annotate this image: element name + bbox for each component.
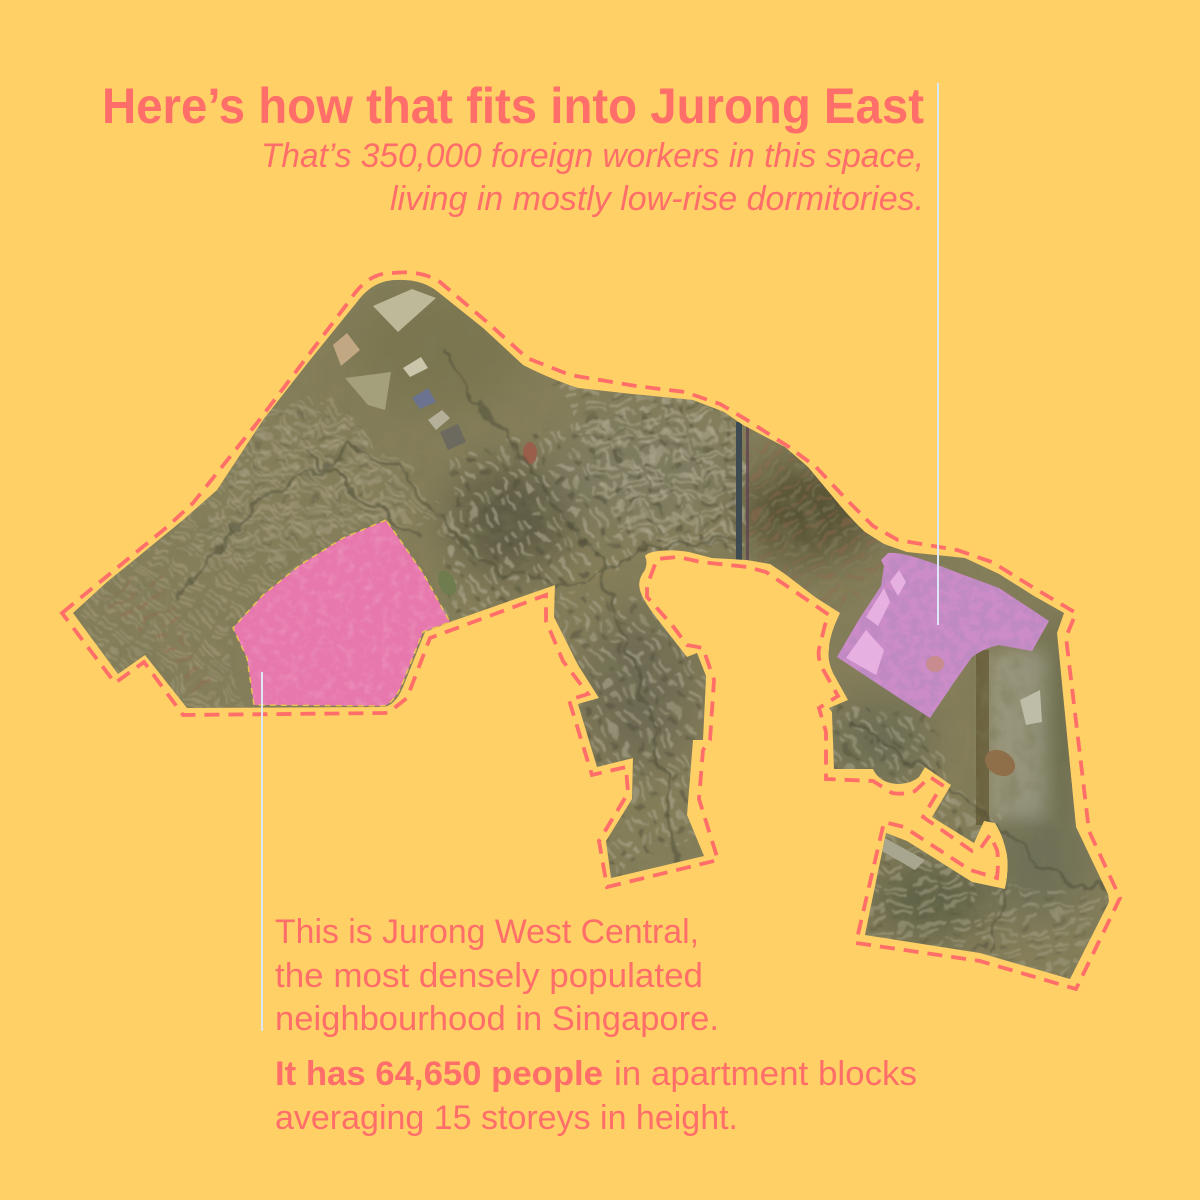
tonal patches bbox=[350, 290, 1090, 935]
subtitle: That’s 350,000 foreign workers in this space, bbox=[261, 137, 924, 175]
highlight: foreign worker footprint in purple bbox=[835, 550, 1051, 720]
description: Jurong West Central: neighbourhood in Singapore. bbox=[275, 1000, 719, 1038]
title: Here’s how that fits into Jurong East bbox=[102, 78, 924, 134]
dashed boundary around the map bbox=[62, 272, 1120, 989]
population fact: It has 64,650 people bbox=[275, 1055, 603, 1093]
road lines bbox=[180, 350, 1100, 950]
subtitle bbox=[261, 137, 924, 218]
leader line: Jurong East bbox=[937, 83, 939, 625]
population fact bbox=[275, 1055, 917, 1137]
subtitle: living in mostly low-rise dormitories. bbox=[390, 180, 924, 218]
highlight: Jurong West Central in pink bbox=[230, 515, 455, 710]
population fact: in apartment blocks bbox=[614, 1055, 917, 1093]
population fact: averaging 15 storeys in height. bbox=[275, 1099, 738, 1137]
leader line: Jurong West Central bbox=[261, 672, 263, 1031]
description: Jurong West Central: the most densely populated bbox=[275, 957, 703, 995]
canal bbox=[736, 422, 742, 560]
residential block textures bbox=[60, 380, 1120, 990]
description: Jurong West Central: This is Jurong West Central, bbox=[275, 913, 699, 951]
description: Jurong West Central bbox=[275, 913, 719, 1038]
darker vegetation mottling bbox=[73, 280, 1109, 979]
hazy light panel and dark band at east bbox=[988, 650, 1048, 820]
light features: car park, sand, stadia bbox=[333, 289, 1042, 870]
satellite map of Jurong bbox=[73, 280, 1109, 979]
map base colour bbox=[73, 280, 1109, 979]
